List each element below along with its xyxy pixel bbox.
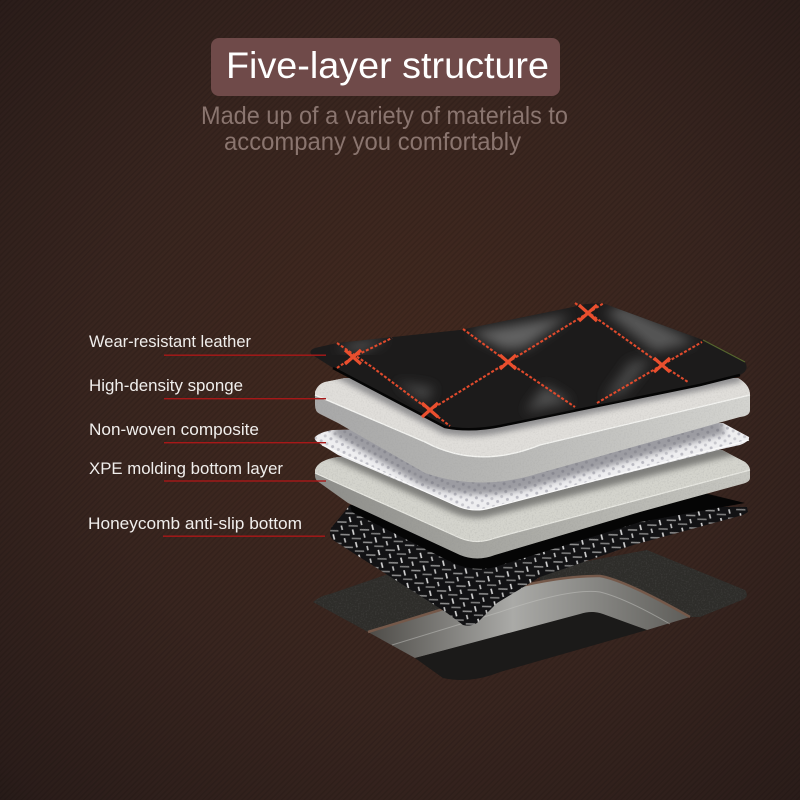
layer: honeycomb anti-slip bottom [330, 492, 748, 626]
label: wear-resistant leather: Wear-resistant leather [89, 332, 251, 351]
subtitle [201, 102, 568, 156]
title badge: Five-layer structure [226, 45, 549, 86]
layer stack illustration [310, 303, 754, 680]
label: high-density sponge: High-density sponge [89, 376, 243, 395]
layer: XPE molding [314, 450, 750, 558]
layer: non-woven composite [315, 422, 749, 510]
layer: high-density sponge [314, 378, 750, 482]
label: non-woven composite: Non-woven composite [89, 420, 259, 439]
title badge [211, 38, 560, 96]
label: XPE molding bottom layer: XPE molding bottom layer [89, 459, 283, 478]
layer: car floor felt and frame [310, 548, 752, 680]
stitching [337, 303, 702, 426]
stitch crossings [345, 305, 670, 417]
layer: wear-resistant leather [310, 303, 747, 429]
subtitle: Made up of a variety of materials to [201, 102, 568, 130]
label: honeycomb anti-slip bottom: Honeycomb anti-slip bottom [88, 514, 302, 533]
subtitle: accompany you comfortably [224, 128, 521, 156]
